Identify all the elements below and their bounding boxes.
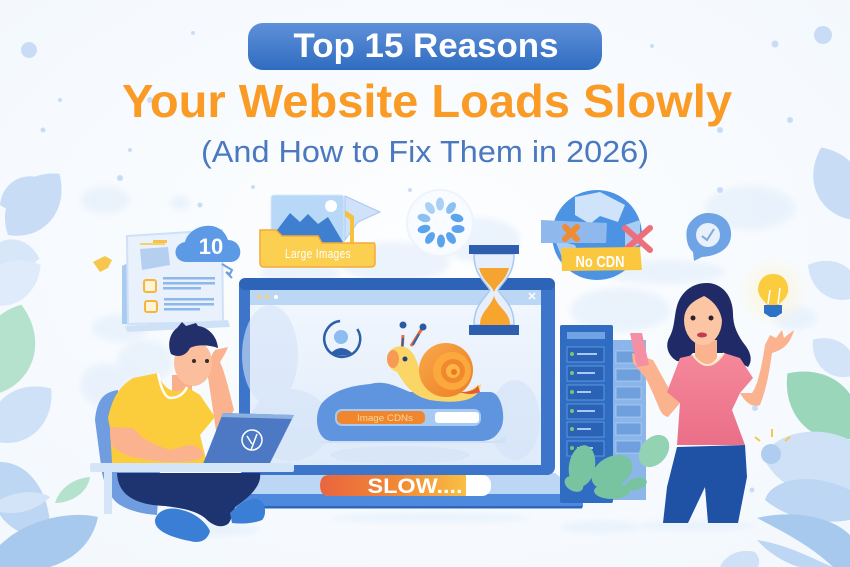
jeans [663, 445, 747, 523]
left arm and phone [630, 333, 680, 417]
browser bar [250, 290, 541, 305]
slow progress bar: SLOW.... [368, 475, 462, 498]
main heading: Your Website Loads Slowly [122, 75, 732, 127]
neck [695, 340, 717, 365]
keyboard base [230, 473, 583, 508]
image folder: Large Images [260, 195, 380, 267]
typing arm [110, 427, 204, 462]
screen [250, 290, 541, 465]
document card with cloud [122, 226, 240, 332]
leaves: left top [0, 159, 77, 273]
server racks [560, 325, 646, 503]
title block [122, 23, 732, 169]
image progress bar [335, 409, 481, 426]
globe with No CDN banner [541, 190, 650, 280]
snail [387, 322, 481, 402]
subtitle: (And How to Fix Them in 2026) [201, 134, 649, 169]
hourglass [469, 245, 519, 335]
checkboxes [144, 280, 157, 312]
leaves: left middle [0, 247, 66, 458]
woman standing [630, 283, 794, 523]
face [684, 295, 722, 345]
head [174, 340, 212, 386]
leaves: right bottom [720, 432, 850, 567]
hair [667, 283, 751, 367]
shoes [155, 499, 265, 542]
sparkles and gear [93, 256, 790, 464]
screen avatar spinner [318, 317, 365, 363]
neck [172, 375, 192, 398]
title pill: Top 15 Reasons [294, 27, 558, 65]
red X [625, 228, 650, 250]
pink t-shirt [667, 353, 753, 445]
chair [95, 390, 160, 515]
trousers [117, 473, 260, 526]
screen frame [239, 278, 555, 475]
image progress bar: Image CDNs [357, 413, 414, 423]
speech bubble icon [686, 213, 731, 261]
leaves: left bottom [0, 462, 98, 567]
title pill [248, 23, 602, 70]
face [192, 359, 209, 363]
right arm and hand [740, 330, 794, 406]
man sitting [90, 322, 294, 542]
cloud 10: 10 [199, 234, 223, 259]
main laptop [230, 278, 583, 508]
leaves: right top [799, 138, 850, 387]
desk [90, 463, 294, 472]
loading spinner [407, 190, 473, 256]
raised arm [208, 347, 234, 437]
No CDN ribbon: No CDN [576, 254, 624, 271]
hair [169, 322, 218, 356]
image folder: Large Images: Large Images [285, 246, 351, 261]
leaf: right green [769, 353, 850, 458]
lightbulb [737, 256, 809, 328]
cloud widget [317, 383, 505, 443]
yellow t-shirt [108, 373, 215, 463]
small laptop [203, 413, 294, 464]
blocked server banner [541, 220, 607, 243]
plant [562, 429, 676, 499]
slow progress bar [320, 475, 491, 498]
